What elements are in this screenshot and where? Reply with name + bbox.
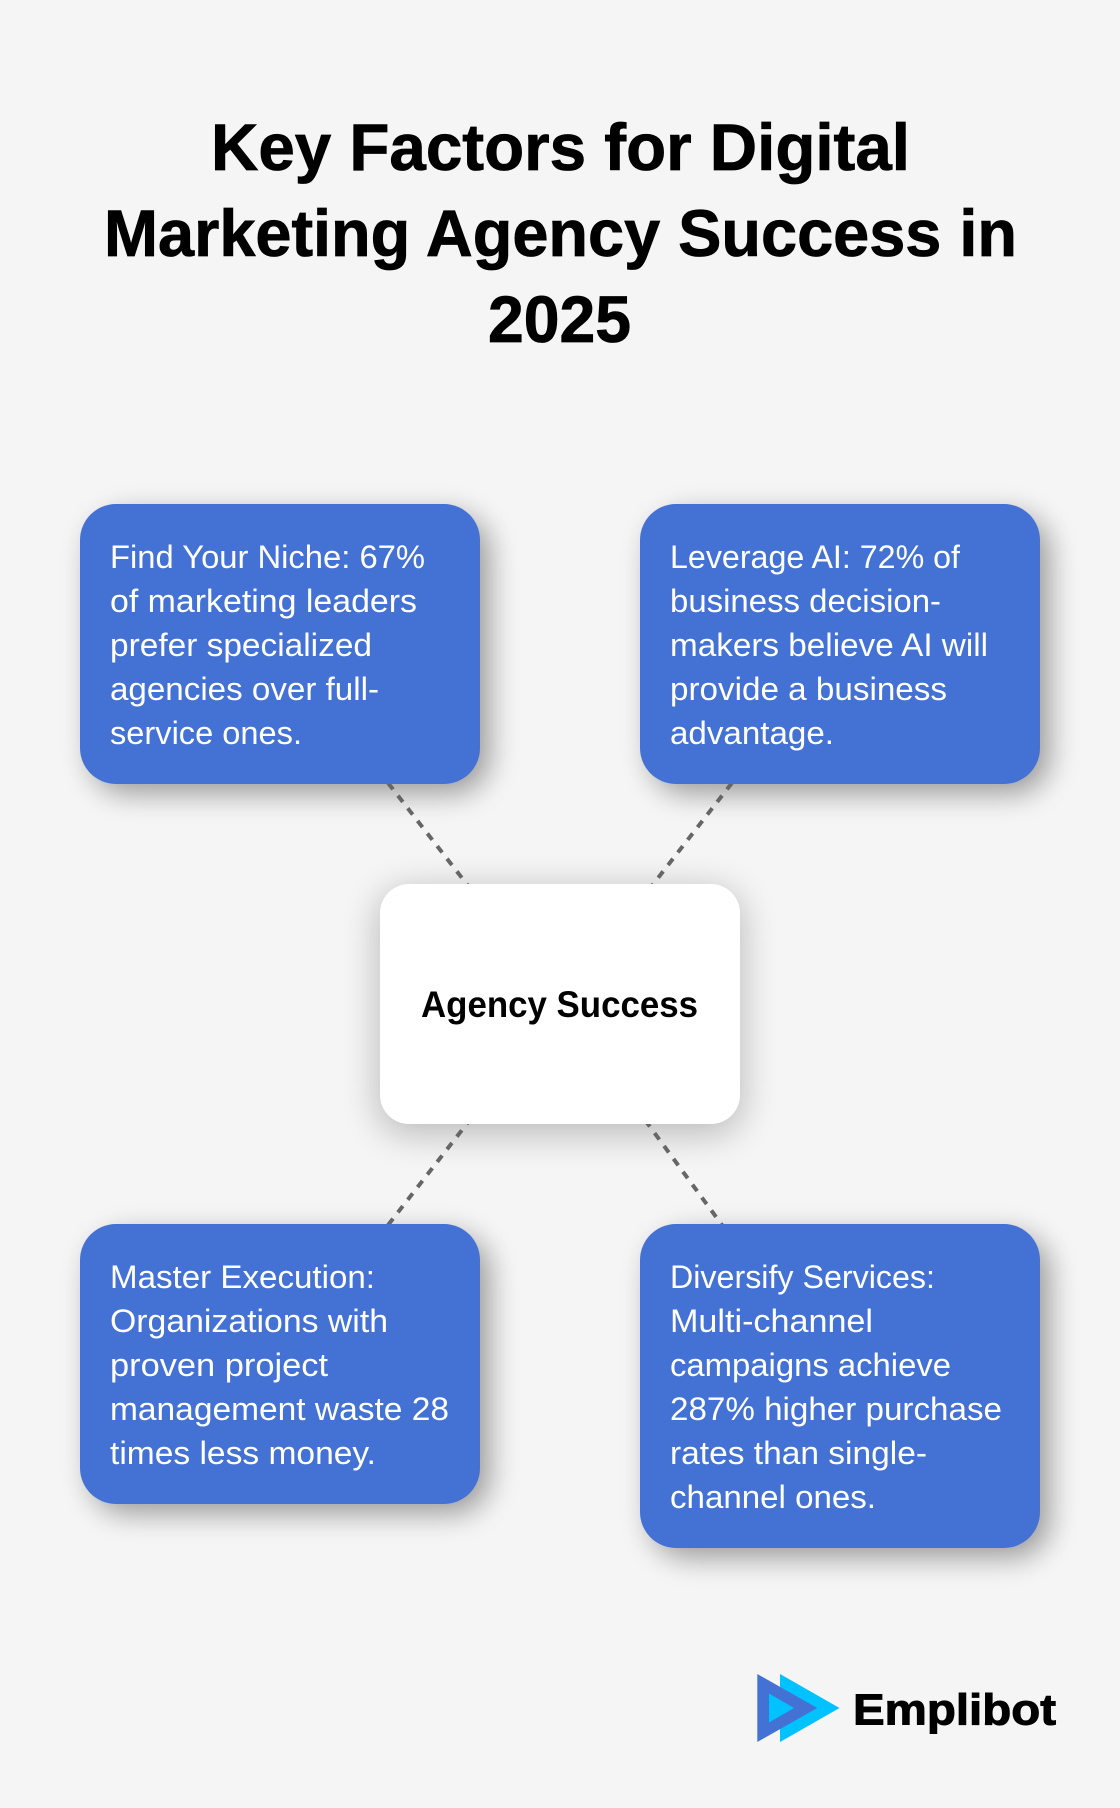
- panel: master execution: proven project: [110, 1347, 328, 1383]
- title: Marketing Agency Success in: [104, 196, 1017, 270]
- panel: diversify services: channel ones.: [670, 1479, 876, 1515]
- panel: diversify services: campaigns achieve: [670, 1347, 951, 1383]
- panel: find your niche: of marketing leaders: [110, 583, 417, 619]
- panel: agency success centre: [380, 884, 740, 1124]
- panel: master execution: management waste 28: [110, 1391, 449, 1427]
- panel: leverage AI: business decision-: [670, 583, 941, 619]
- panel: leverage AI: advantage.: [670, 715, 834, 751]
- icon: emplibot logo mark: [757, 1674, 840, 1742]
- panel: find your niche: agencies over full-: [110, 671, 379, 707]
- panel: find your niche: service ones.: [110, 715, 302, 751]
- panel: leverage AI: Leverage AI: 72% of: [670, 539, 960, 575]
- panel: diversify services: rates than single-: [670, 1435, 927, 1471]
- title: Key Factors for Digital: [211, 110, 910, 184]
- panel: diversify services: 287% higher purchase: [670, 1391, 1002, 1427]
- panel: diversify services: Diversify Services:: [670, 1259, 935, 1295]
- panel: master execution: Master Execution:: [110, 1259, 375, 1295]
- panel: diversify services: [640, 1224, 1040, 1548]
- dashed connectors: [280, 644, 840, 1386]
- title: 2025: [488, 282, 631, 356]
- panel: diversify services: Multi-channel: [670, 1303, 873, 1339]
- panel: master execution: Organizations with: [110, 1303, 388, 1339]
- panel: leverage AI: provide a business: [670, 671, 947, 707]
- panel: master execution: times less money.: [110, 1435, 376, 1471]
- panel: leverage AI: [640, 504, 1040, 784]
- panel: find your niche: prefer specialized: [110, 627, 372, 663]
- title: [104, 110, 1017, 356]
- panel: agency success centre: Agency Success: [421, 984, 698, 1025]
- panel: leverage AI: makers believe AI will: [670, 627, 988, 663]
- brand name: Emplibot: [853, 1686, 1056, 1734]
- panel: master execution: [80, 1224, 480, 1504]
- panel: find your niche: [80, 504, 480, 784]
- panel: find your niche: Find Your Niche: 67%: [110, 539, 425, 575]
